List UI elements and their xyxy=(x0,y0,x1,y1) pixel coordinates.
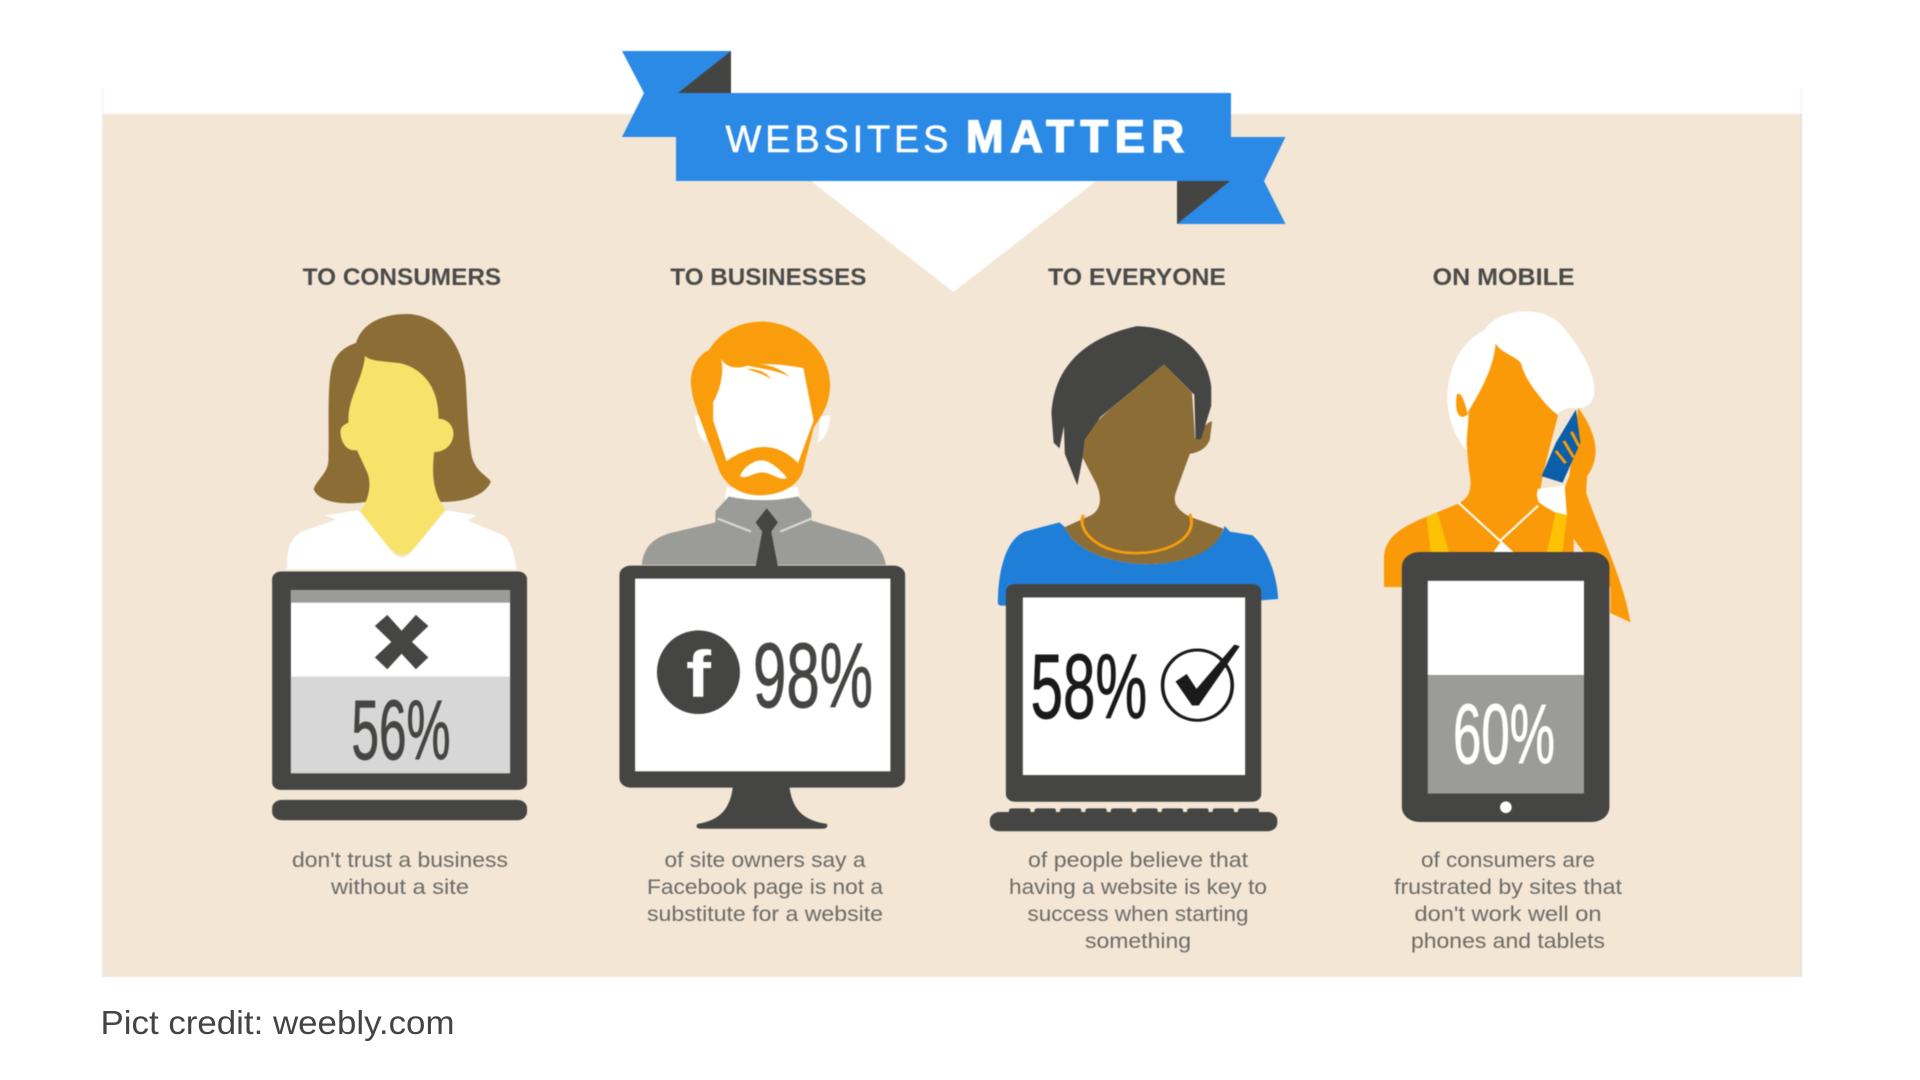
heading: on mobile: ON MOBILE xyxy=(1433,264,1575,291)
figure: woman with brown hair xyxy=(272,314,527,820)
tablet xyxy=(1402,552,1609,822)
icon: facebook f: f xyxy=(686,637,712,711)
description: businesses: of site owners say a xyxy=(664,849,866,872)
description: everyone xyxy=(1009,849,1267,953)
infographic artwork xyxy=(102,51,1802,977)
laptop xyxy=(272,572,527,820)
description: mobile: frustrated by sites that xyxy=(1394,876,1622,899)
description: consumers: without a site xyxy=(330,876,469,899)
white pointer triangle xyxy=(811,181,1096,292)
title ribbon xyxy=(622,51,1286,224)
panel: beige background xyxy=(102,88,1802,977)
heading: to everyone: TO EVERYONE xyxy=(1048,264,1226,291)
title text: MATTER xyxy=(966,111,1184,162)
description: businesses: Facebook page is not a xyxy=(647,876,883,899)
picture credit: Pict credit: weebly.com xyxy=(100,1004,454,1041)
description: everyone: having a website is key to xyxy=(1009,876,1267,899)
figure: woman with dark hair xyxy=(990,326,1278,831)
description: businesses: substitute for a website xyxy=(647,903,883,926)
laptop with keyboard xyxy=(990,584,1277,831)
figure: man with orange beard xyxy=(619,321,905,829)
heading: to consumers: TO CONSUMERS xyxy=(303,264,501,291)
description: everyone: of people believe that xyxy=(1028,849,1248,872)
stat: 98%: 98% xyxy=(753,625,873,727)
title text: WEBSITES xyxy=(726,119,948,161)
icon: check mark in circle xyxy=(1163,644,1240,720)
stat: 58%: 58% xyxy=(1031,636,1147,738)
icon: cross xyxy=(375,615,428,669)
stat: 56%: 56% xyxy=(352,683,450,777)
description: everyone: something xyxy=(1085,930,1191,953)
stat: 60%: 60% xyxy=(1453,687,1555,781)
description: businesses xyxy=(647,849,883,926)
monitor xyxy=(619,566,905,829)
description: mobile xyxy=(1394,849,1622,953)
description: mobile: phones and tablets xyxy=(1411,930,1605,953)
description: mobile: don't work well on xyxy=(1414,903,1602,926)
description: everyone: success when starting xyxy=(1028,903,1248,926)
description: consumers: don't trust a business xyxy=(292,849,508,872)
figure: woman on phone xyxy=(1384,311,1630,822)
icon: facebook circle xyxy=(657,630,740,714)
description: consumers xyxy=(292,849,508,899)
description: mobile: of consumers are xyxy=(1421,849,1595,872)
heading: to businesses: TO BUSINESSES xyxy=(670,264,866,291)
